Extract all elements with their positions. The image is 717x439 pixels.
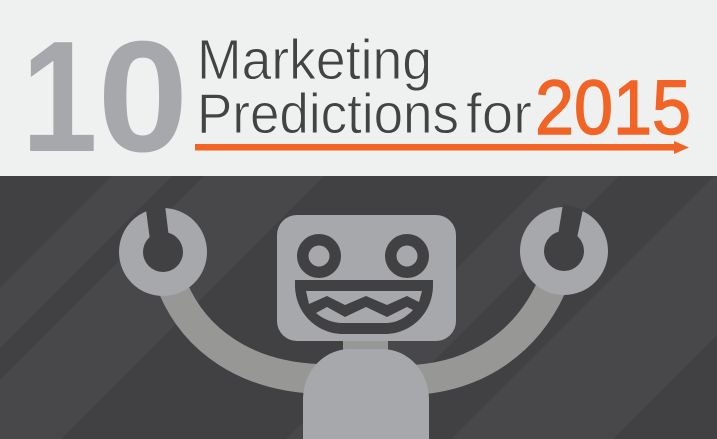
- big number 10: 0: [98, 9, 188, 185]
- title: [22, 9, 691, 185]
- left claw: [119, 205, 207, 296]
- body: [303, 349, 429, 439]
- big number 10: [22, 9, 188, 185]
- upper teeth: [306, 291, 422, 305]
- left arm: [173, 288, 318, 379]
- big number 10: 1: [22, 9, 98, 185]
- arrow underline: [195, 141, 689, 154]
- dark panel background: [0, 176, 717, 439]
- right eye: [385, 234, 429, 278]
- lower teeth: [316, 307, 413, 323]
- header panel background: [0, 0, 717, 176]
- word: Predictions: Predictions: [197, 82, 459, 146]
- year 2015: 2015: [535, 65, 691, 151]
- word: Marketing: Marketing: [197, 28, 432, 92]
- neck: [343, 338, 388, 354]
- robot illustration: [119, 204, 608, 439]
- right arm: [414, 288, 551, 380]
- left eye: [297, 234, 341, 278]
- right claw: [520, 204, 608, 295]
- head: [277, 215, 456, 341]
- word: for: for: [466, 82, 532, 146]
- mouth: [295, 280, 433, 334]
